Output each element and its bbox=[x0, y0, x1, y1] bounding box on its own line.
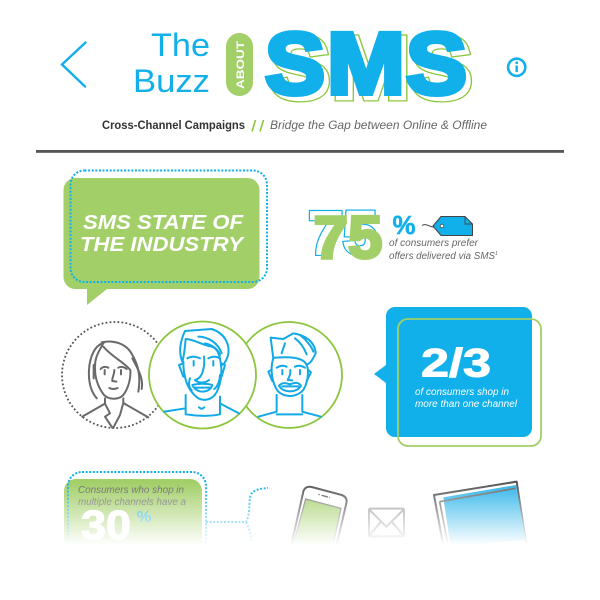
bottom fade bbox=[0, 482, 600, 545]
number 75: 75 bbox=[308, 200, 378, 266]
heading: SMS STATE OF bbox=[83, 212, 244, 234]
panel: two thirds stat bbox=[374, 307, 541, 446]
badge: about bbox=[226, 33, 253, 96]
title: SMS: S bbox=[270, 20, 330, 117]
portrait: smiling man bbox=[149, 322, 256, 428]
heading bbox=[80, 212, 245, 256]
title: SMS: M bbox=[332, 20, 410, 117]
green box bbox=[64, 479, 202, 569]
percent sign: % bbox=[136, 509, 152, 526]
description: 1 bbox=[495, 251, 498, 257]
panel: 30 percent stat bbox=[64, 472, 206, 569]
title: SMS: M bbox=[327, 16, 405, 112]
number 75: 75 bbox=[314, 204, 382, 271]
subtitle: Bridge the Gap between Online & Offline bbox=[270, 120, 487, 132]
number 2/3: 2/3 bbox=[421, 342, 491, 386]
description: Consumers who shop in bbox=[78, 484, 184, 496]
title: SMS: S bbox=[406, 16, 467, 112]
title: SMS: S bbox=[265, 16, 325, 112]
percent sign: % bbox=[392, 210, 416, 240]
portrait: man with goatee bbox=[236, 322, 342, 428]
title: The Buzz bbox=[133, 27, 210, 99]
description: more than one channel bbox=[415, 398, 518, 410]
portraits bbox=[62, 322, 342, 428]
title: SMS: S bbox=[411, 20, 472, 117]
icon: laptop bbox=[434, 482, 527, 555]
subtitle bbox=[102, 120, 487, 132]
heading: THE INDUSTRY bbox=[80, 234, 245, 256]
speech bubble bbox=[374, 307, 532, 437]
icon: phone bbox=[292, 487, 347, 552]
panel: SMS state of the industry bbox=[63, 170, 267, 305]
title: The Buzz: Buzz bbox=[133, 63, 210, 99]
title: SMS bbox=[265, 16, 472, 117]
description bbox=[389, 237, 498, 262]
speech bubble bbox=[63, 178, 259, 305]
number 30: 30 bbox=[81, 502, 131, 548]
description bbox=[78, 484, 186, 508]
title: SMS: M bbox=[332, 20, 410, 117]
description bbox=[415, 386, 518, 410]
number 75: 75 bbox=[308, 200, 378, 266]
badge: about: ABOUT bbox=[235, 41, 247, 89]
header bbox=[62, 16, 525, 132]
icon: envelope bbox=[369, 509, 404, 536]
icon: info bbox=[508, 59, 525, 76]
description: of consumers prefer bbox=[389, 237, 478, 249]
title: The Buzz: The bbox=[151, 27, 210, 63]
description: of consumers shop in bbox=[415, 386, 509, 398]
icon: price tag bbox=[422, 216, 472, 236]
description: multiple channels have a bbox=[78, 496, 186, 508]
connector bbox=[206, 488, 268, 546]
subtitle: Cross-Channel Campaigns bbox=[102, 120, 245, 132]
icon: back chevron bbox=[62, 42, 86, 86]
portrait: woman bbox=[62, 322, 168, 428]
title: SMS: S bbox=[411, 20, 472, 117]
description: offers delivered via SMS bbox=[389, 250, 495, 262]
stat: 75 percent bbox=[308, 200, 498, 271]
title: SMS: S bbox=[270, 20, 330, 117]
